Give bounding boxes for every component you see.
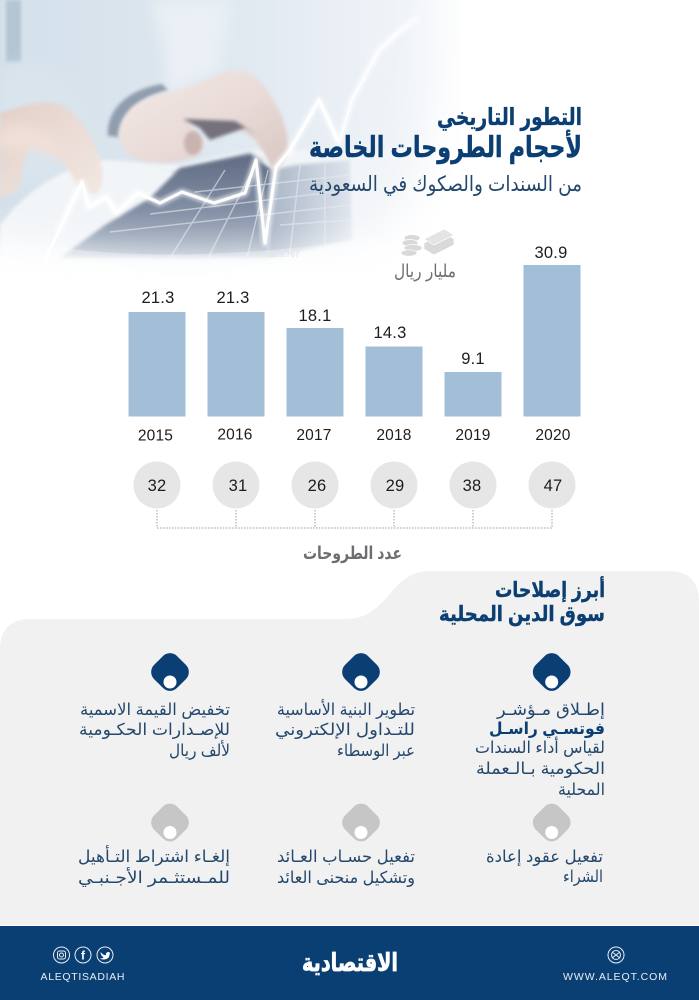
bar chart [128,244,580,444]
panel: reforms background [0,571,699,925]
bar values: 21.3 [142,289,174,307]
shadow under fingers [183,119,258,140]
text: المحلية [558,781,605,799]
text [79,701,230,761]
text: عبر الوسطاء [337,742,415,761]
year labels: 2017 [296,427,332,444]
watch strap [108,84,168,137]
bar values: 30.9 [535,244,567,262]
logo: الاقتصادية [302,949,398,977]
right hand [118,70,288,172]
icon: marker [147,800,193,845]
account name: ALEQTISADIAH [40,971,124,983]
reform item: repo [486,800,603,887]
market line [44,100,339,262]
title: من السندات والصكوك في السعودية [309,173,582,196]
chart tick labels in photo: 1109.767 [267,250,300,259]
icon: marker [338,800,384,845]
unit label: مليار ريال [394,261,456,281]
offering count circles: 31 [229,477,247,495]
bar values: 9.1 [461,350,485,368]
year labels [138,426,571,444]
website: WWW.ALEQT.COM [563,971,667,983]
text: الشراء [563,868,603,887]
text [277,848,415,888]
icon: marker [529,649,575,695]
icon: marker [147,649,193,695]
photo: hands typing on a laptop [0,0,434,260]
text: تفعيل عقود إعادة [486,848,603,867]
text: إطـلاق مـؤشـر [496,701,605,720]
reform item: infrastructure [275,649,415,761]
offering count circles: 47 [544,477,562,495]
offering count circles: 32 [148,477,166,495]
text [486,848,603,887]
laptop body [0,150,340,256]
reform item: yield account [277,800,415,888]
text: إلغـاء اشتراط التـأهيل [78,845,230,867]
offering count circles [134,462,576,508]
bar values: 18.1 [299,307,331,325]
title: لأحجام الطروحات الخاصة [309,129,582,164]
dotted connector [157,510,552,528]
year labels: 2015 [138,428,173,444]
text: تطوير البنية الأساسية [277,699,415,720]
icon: marker [529,800,575,845]
year labels: 2019 [455,427,491,444]
social icons: f [81,948,86,962]
text: للمـستثـمر الأجـنبـي [78,867,230,888]
reforms heading [439,575,605,626]
year labels: 2020 [535,427,571,444]
bars [128,265,580,416]
text: للتـداول الإلكتروني [275,721,415,740]
title [309,104,582,196]
reforms heading: أبرز إصلاحات [495,575,605,602]
reform item: foreign investor [78,800,230,888]
year labels: 2016 [217,426,253,444]
text: للإصـدارات الحكـومية [79,721,230,740]
text: تخفيض القيمة الاسمية [80,701,230,719]
footer [0,926,699,1000]
text [275,699,415,761]
text: فوتسـي راسـل [489,720,605,739]
offering count circles: 38 [463,477,481,495]
text: لألف ريال [169,740,230,761]
count label: عدد الطروحات [303,543,402,564]
bar values [142,244,567,368]
icon: money stack [401,229,454,256]
text: لقياس أداء السندات [475,736,605,757]
year labels: 2018 [376,427,412,444]
left hand [0,102,103,200]
text: تفعيل حسـاب العـائد [277,848,415,866]
text: وتشكيل منحنى العائد [277,869,415,888]
text [475,701,605,799]
reform item: FTSE Russell index [475,649,605,799]
bar values: 14.3 [374,324,406,342]
keyboard [60,154,275,258]
offering count circles: 26 [308,477,326,495]
offering count circles: 29 [386,477,404,495]
social icons [54,947,113,963]
icon: marker [338,649,384,695]
bar values: 21.3 [217,289,249,307]
laptop screen edge [362,35,404,160]
reform item: nominal value [79,649,230,761]
title: التطور التاريخي [437,104,582,131]
reforms heading: سوق الدين المحلية [439,603,605,626]
text [78,845,230,888]
icon: website [608,947,624,963]
text: الحكومية بـالـعملة [476,760,605,779]
market line glow [58,17,419,243]
